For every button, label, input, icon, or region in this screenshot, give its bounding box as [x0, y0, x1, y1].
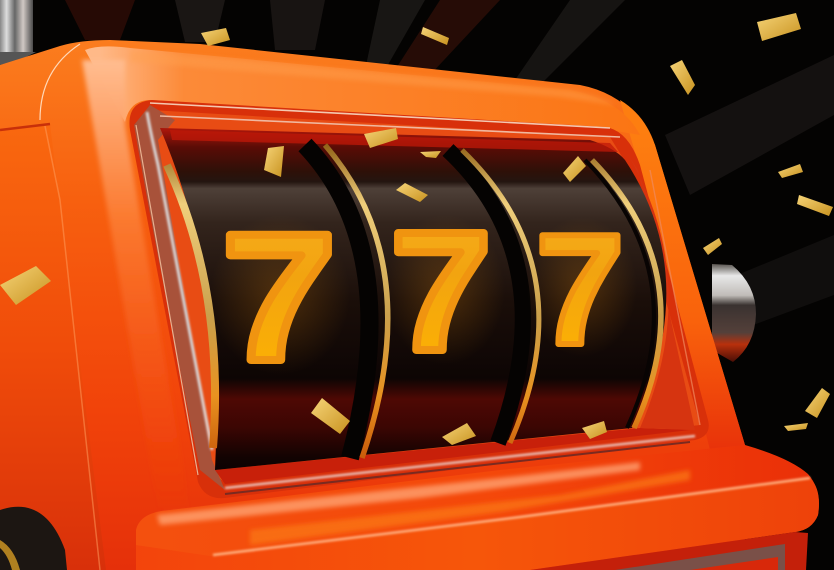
- right glass pane: [625, 150, 695, 430]
- reels: [160, 128, 666, 470]
- machine base ledge: [136, 445, 819, 570]
- side knob: [712, 264, 756, 362]
- number sevens: 7: [390, 197, 492, 387]
- number sevens: 7: [536, 202, 624, 378]
- reel drum background: [160, 128, 666, 470]
- seam highlight: [40, 44, 80, 120]
- side panel: [0, 124, 106, 570]
- lever pole: [0, 0, 36, 65]
- ledge edge highlight: [213, 478, 810, 555]
- number sevens: [210, 195, 637, 399]
- number sevens: 7: [222, 195, 336, 399]
- glass left edge: [134, 105, 225, 490]
- glass window: [129, 100, 709, 498]
- panel highlight: [45, 126, 100, 570]
- ledge front face: [136, 478, 819, 570]
- glass bottom lines: [225, 436, 695, 488]
- bottom red sill: [215, 428, 690, 484]
- top sheen: [130, 50, 615, 105]
- red reflection on reels: [170, 130, 618, 152]
- gold confetti: [0, 13, 833, 445]
- right pillar: [620, 100, 745, 450]
- ledge top sheen: [157, 462, 640, 525]
- gold reel rings: [167, 145, 661, 458]
- under-ledge body: [530, 532, 808, 570]
- bottom-left dark knob: [0, 507, 67, 570]
- peach pillar highlight: [82, 60, 190, 520]
- glass top lines: [150, 103, 610, 128]
- grey trim strip: [615, 544, 785, 570]
- top band: [85, 46, 640, 135]
